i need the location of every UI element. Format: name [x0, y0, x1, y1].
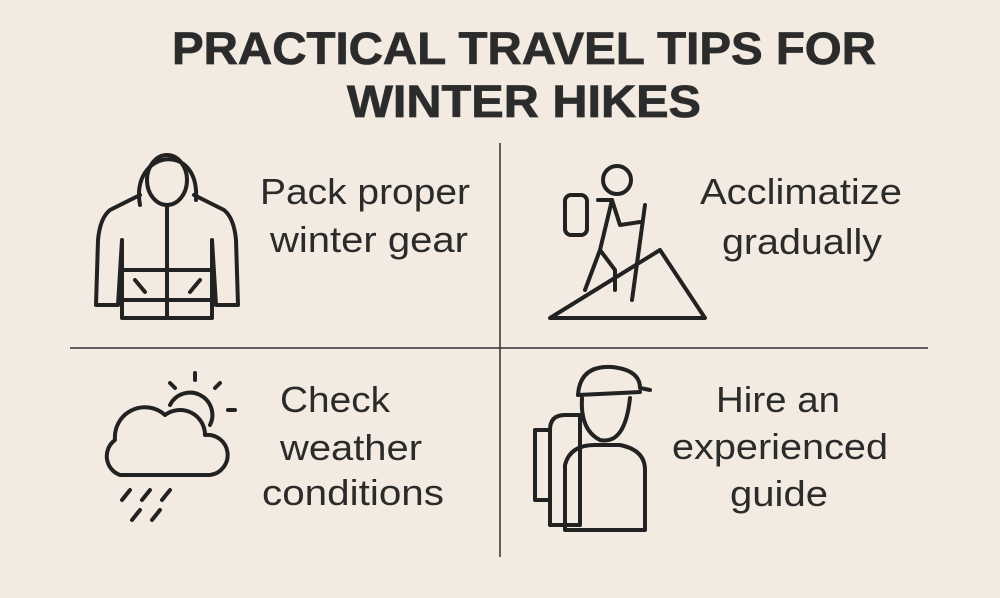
- text: hire an experienced guide: Hire an: [716, 379, 840, 420]
- text: check weather conditions: conditions: [262, 472, 444, 513]
- icon: weather: [107, 373, 235, 520]
- icon: hiker: [550, 166, 705, 318]
- title: PRACTICAL TRAVEL TIPS FOR: [172, 23, 876, 74]
- text: check weather conditions: weather: [279, 427, 422, 468]
- icon: guide: [535, 367, 650, 530]
- text: acclimatize gradually: [700, 171, 902, 262]
- text: pack proper winter gear: [260, 171, 470, 260]
- text: check weather conditions: [262, 379, 444, 513]
- text: pack proper winter gear: Pack proper: [260, 171, 470, 212]
- text: acclimatize gradually: Acclimatize: [700, 171, 902, 212]
- text: hire an experienced guide: [672, 379, 888, 514]
- title: [172, 23, 876, 127]
- icon: jacket: [96, 155, 238, 318]
- title: WINTER HIKES: [347, 76, 701, 127]
- text: check weather conditions: Check: [280, 379, 391, 420]
- text: pack proper winter gear: winter gear: [269, 219, 468, 260]
- text: acclimatize gradually: gradually: [722, 221, 882, 262]
- text: hire an experienced guide: experienced: [672, 426, 888, 467]
- text: hire an experienced guide: guide: [730, 473, 828, 514]
